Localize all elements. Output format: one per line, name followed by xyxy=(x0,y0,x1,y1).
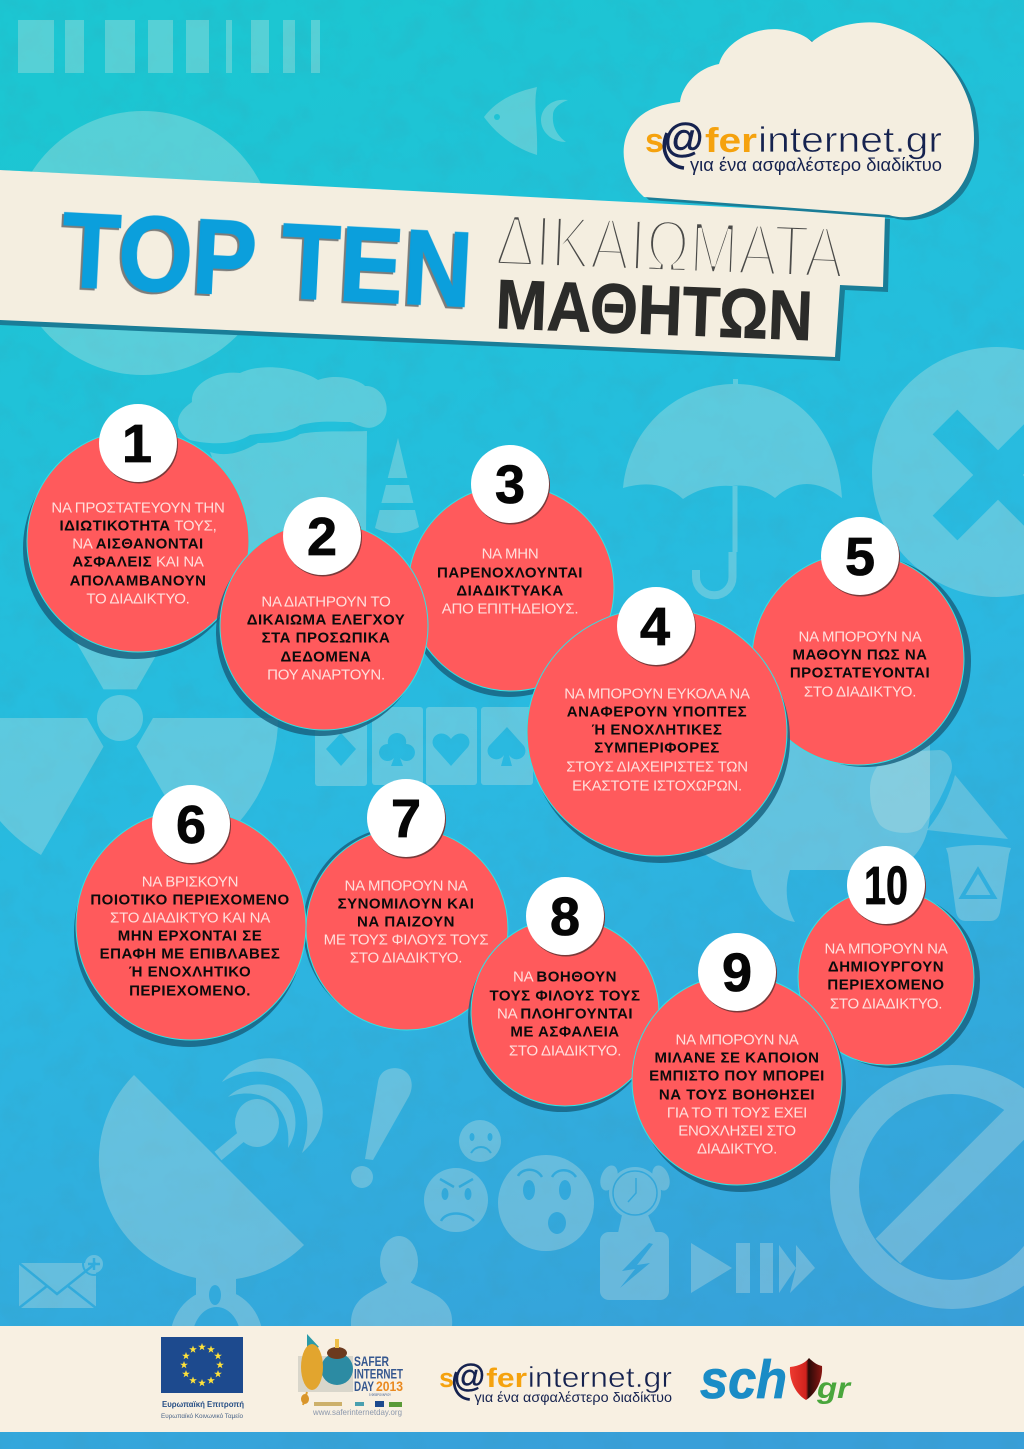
icon: alarm clock xyxy=(600,1166,670,1232)
icon: radiation symbol xyxy=(0,560,278,855)
circle 1: ΝΑ ΠΡΟΣΤΑΤΕΥΟΥΝ ΤΗΝ xyxy=(51,500,225,516)
circle 5: ΝΑ ΜΠΟΡΟΥΝ ΝΑ xyxy=(799,628,922,646)
circle 5: 5 xyxy=(845,527,875,587)
cloud logo panel xyxy=(624,22,979,220)
rights circles xyxy=(23,404,980,1192)
circle 6: 6 xyxy=(176,795,206,855)
heading: ΜΑΘΗΤΩΝ: ΜΑΘΗΤΩΝ xyxy=(494,265,814,355)
logo: Safer Internet Day 2013: www.saferinternetday.org xyxy=(312,1407,402,1417)
icon: recycling bin xyxy=(946,845,1011,921)
logo: Safer Internet Day 2013: INTERNET xyxy=(354,1366,403,1382)
circle 1: ΑΣΦΑΛΕΙΣ ΚΑΙ ΝΑ xyxy=(72,554,204,570)
circle 7: ΝΑ ΠΑΙΖΟΥΝ xyxy=(357,914,455,930)
circle 3: ΝΑ ΜΗΝ xyxy=(482,546,538,562)
logo: saferinternet.gr: internet.gr xyxy=(758,119,942,160)
circle 9: ΔΙΑΔΙΚΤΥΟ. xyxy=(697,1140,777,1158)
heading: ΔΙΚΑΙΩΜΑΤΑ: ΔΙΚΑΙΩΜΑΤΑ xyxy=(494,198,846,294)
circle 7: ΜΕ ΤΟΥΣ ΦΙΛΟΥΣ ΤΟΥΣ xyxy=(324,932,488,948)
logo: sch.gr xyxy=(700,1350,853,1410)
icon: speech bubble xyxy=(700,740,930,922)
icon: fish xyxy=(484,87,568,155)
circle 4: ΕΚΑΣΤΟΤΕ ΙΣΤΟΧΩΡΩΝ. xyxy=(572,778,742,794)
circle 6: Ή ΕΝΟΧΛΗΤΙΚΟ xyxy=(129,964,251,980)
circle 2: ΔΕΔΟΜΕΝΑ xyxy=(280,648,372,666)
circle 1: 1 xyxy=(122,414,152,474)
icon: playing cards xyxy=(315,707,533,786)
icon: barcode xyxy=(18,20,320,73)
icon: satellite dish xyxy=(99,1058,323,1360)
circle 8: ΝΑ ΒΟΗΘΟΥΝ xyxy=(513,968,617,986)
circle 6: ΝΑ ΒΡΙΣΚΟΥΝ xyxy=(142,874,238,890)
circle 6: ΠΟΙΟΤΙΚΟ ΠΕΡΙΕΧΟΜΕΝΟ xyxy=(90,892,290,908)
circle 4: ΣΤΟΥΣ ΔΙΑΧΕΙΡΙΣΤΕΣ ΤΩΝ xyxy=(566,758,748,776)
circle 4 xyxy=(527,587,790,863)
circle 4: ΣΥΜΠΕΡΙΦΟΡΕΣ xyxy=(594,740,720,756)
circle 3: ΠΑΡΕΝΟΧΛΟΥΝΤΑΙ xyxy=(437,564,583,582)
logo: saferinternet.gr: fer xyxy=(705,122,757,160)
circle 10: ΝΑ ΜΠΟΡΟΥΝ ΝΑ xyxy=(825,940,948,958)
circle 1 xyxy=(23,404,249,659)
circle 1: ΙΔΙΩΤΙΚΟΤΗΤΑ ΤΟΥΣ, xyxy=(59,518,217,534)
circle 10: 10 xyxy=(864,856,908,916)
logo: saferinternet.gr footer xyxy=(439,1358,672,1405)
banner shadow xyxy=(0,170,890,361)
circle 10: ΔΗΜΙΟΥΡΓΟΥΝ xyxy=(828,958,944,976)
circle 2: 2 xyxy=(307,507,337,567)
circle 5: ΣΤΟ ΔΙΑΔΙΚΤΥΟ. xyxy=(804,684,916,700)
logo: saferinternet.gr footer: @ xyxy=(453,1358,486,1394)
circle 3: ΔΙΑΔΙΚΤΥΑΚΑ xyxy=(456,582,564,600)
icon: large circle behind banner xyxy=(11,111,275,375)
circle 3 xyxy=(406,445,614,697)
logo: sch.gr: gr xyxy=(816,1372,853,1405)
footer strip xyxy=(0,1326,1024,1432)
logo: Safer Internet Day 2013: 5 ΦΕΒΡΟΥΑΡΙΟΥ xyxy=(369,1392,391,1397)
circle 6: ΜΗΝ ΕΡΧΟΝΤΑΙ ΣΕ xyxy=(118,928,262,944)
icon: surprised face xyxy=(498,1155,594,1251)
logo: Safer Internet Day 2013 xyxy=(298,1334,403,1417)
header banner xyxy=(0,170,890,361)
circle 8: ΜΕ ΑΣΦΑΛΕΙΑ xyxy=(510,1024,620,1040)
circle 10: ΠΕΡΙΕΧΟΜΕΝΟ xyxy=(827,976,945,994)
circle 7: ΝΑ ΜΠΟΡΟΥΝ ΝΑ xyxy=(345,878,468,894)
heading: TOP TEN: TOP TEN xyxy=(59,189,475,330)
logo: saferinternet.gr footer: για ένα ασφαλέστερο διαδίκτυο xyxy=(474,1389,672,1405)
cloud xyxy=(624,22,974,217)
circle 6: ΣΤΟ ΔΙΑΔΙΚΤΥΟ ΚΑΙ ΝΑ xyxy=(110,910,270,926)
circle 2 xyxy=(216,497,428,736)
logo: Safer Internet Day 2013: SAFER xyxy=(354,1353,389,1369)
circle 9: ΕΜΠΙΣΤΟ ΠΟΥ ΜΠΟΡΕΙ xyxy=(649,1068,825,1084)
circle 6: ΕΠΑΦΗ ΜΕ ΕΠΙΒΛΑΒΕΣ xyxy=(100,946,280,962)
logo: saferinternet.gr: s xyxy=(645,122,664,160)
circle 2: ΣΤΑ ΠΡΟΣΩΠΙΚΑ xyxy=(262,630,390,646)
icon: drink with foam xyxy=(178,367,387,640)
circle 4: 4 xyxy=(640,597,670,657)
logo: Safer Internet Day 2013: 2013 xyxy=(376,1378,403,1394)
circle 9: ΓΙΑ ΤΟ ΤΙ ΤΟΥΣ ΕΧΕΙ xyxy=(667,1104,807,1122)
circle 8: 8 xyxy=(550,887,580,947)
icon: prohibition sign xyxy=(844,1080,1024,1294)
circle 8: ΤΟΥΣ ΦΙΛΟΥΣ ΤΟΥΣ xyxy=(490,988,640,1004)
circle 9: ΝΑ ΜΠΟΡΟΥΝ ΝΑ xyxy=(676,1032,799,1048)
icon: X circle xyxy=(872,347,1024,597)
circle 3: 3 xyxy=(495,455,525,515)
icon: person xyxy=(351,1236,452,1326)
circle 10: ΣΤΟ ΔΙΑΔΙΚΤΥΟ. xyxy=(830,996,942,1012)
logo: EU flag xyxy=(161,1337,244,1420)
logo: saferinternet.gr footer: fer xyxy=(486,1363,527,1393)
circle 5: ΜΑΘΟΥΝ ΠΩΣ ΝΑ xyxy=(792,646,928,664)
icon: envelope xyxy=(19,1255,103,1308)
logo: saferinternet.gr footer: internet.gr xyxy=(528,1361,672,1393)
circle 9: 9 xyxy=(722,943,752,1003)
logo: saferinternet.gr: για ένα ασφαλέστερο διαδίκτυο xyxy=(690,155,942,175)
logo: Safer Internet Day 2013: DAY xyxy=(354,1378,374,1394)
circle 9: ΜΙΛΑΝΕ ΣΕ ΚΑΠΟΙΟΝ xyxy=(654,1050,820,1066)
circle 4: ΑΝΑΦΕΡΟΥΝ ΥΠΟΠΤΕΣ xyxy=(567,704,747,720)
cloud shadow xyxy=(629,25,979,220)
circle 8: ΝΑ ΠΛΟΗΓΟΥΝΤΑΙ xyxy=(497,1006,633,1022)
icon: sad face xyxy=(459,1120,501,1162)
circle 9 xyxy=(632,933,846,1192)
circle 9: ΝΑ ΤΟΥΣ ΒΟΗΘΗΣΕΙ xyxy=(659,1086,815,1104)
circle 2: ΝΑ ΔΙΑΤΗΡΟΥΝ ΤΟ xyxy=(261,594,391,610)
circle 7: 7 xyxy=(391,789,421,849)
icon: exclamation mark xyxy=(351,1068,412,1188)
circle 1: ΑΠΟΛΑΜΒΑΝΟΥΝ xyxy=(70,572,206,590)
logo: sch.gr: sch xyxy=(700,1350,787,1410)
circle 3: ΑΠΟ ΕΠΙΤΗΔΕΙΟΥΣ. xyxy=(442,600,578,618)
circle 7 xyxy=(303,779,508,1030)
banner xyxy=(0,170,885,357)
circle 9: ΕΝΟΧΛΗΣΕΙ ΣΤΟ xyxy=(678,1122,796,1140)
circle 8 xyxy=(468,877,659,1112)
circle 10 xyxy=(798,846,980,1068)
icon: angry face xyxy=(424,1168,488,1232)
circle 2: ΠΟΥ ΑΝΑΡΤΟΥΝ. xyxy=(267,666,385,684)
circle 1: ΤΟ ΔΙΑΔΙΚΤΥΟ. xyxy=(86,590,190,608)
icon: party hat xyxy=(375,438,419,533)
logo: saferinternet.gr xyxy=(645,115,942,175)
circle 6: ΠΕΡΙΕΧΟΜΕΝΟ. xyxy=(129,982,251,1000)
circle 2: ΔΙΚΑΙΩΜΑ ΕΛΕΓΧΟΥ xyxy=(247,612,405,628)
circle 5: ΠΡΟΣΤΑΤΕΥΟΝΤΑΙ xyxy=(790,664,930,682)
circle 7: ΣΥΝΟΜΙΛΟΥΝ ΚΑΙ xyxy=(338,896,474,912)
circle 1: ΝΑ ΑΙΣΘΑΝΟΝΤΑΙ xyxy=(72,536,204,552)
logo: EU flag: Ευρωπαϊκή Επιτροπή xyxy=(162,1399,244,1409)
icon: umbrella xyxy=(623,379,842,595)
icon: media controls xyxy=(691,1243,815,1293)
icon: battery with lightning xyxy=(600,1232,669,1300)
circle 4: Ή ΕΝΟΧΛΗΤΙΚΕΣ xyxy=(592,722,722,738)
icon: ice cream xyxy=(870,750,1008,839)
circle 4: ΝΑ ΜΠΟΡΟΥΝ ΕΥΚΟΛΑ ΝΑ xyxy=(564,686,750,702)
logo: saferinternet.gr: @ xyxy=(663,115,705,161)
circle 7: ΣΤΟ ΔΙΑΔΙΚΤΥΟ. xyxy=(350,950,462,966)
circle 8: ΣΤΟ ΔΙΑΔΙΚΤΥΟ. xyxy=(509,1042,621,1060)
circle 5 xyxy=(752,517,971,767)
logo: saferinternet.gr footer: s xyxy=(439,1363,454,1393)
logo: EU flag: Ευρωπαϊκό Κοινωνικό Ταμείο xyxy=(161,1412,243,1420)
circle 6 xyxy=(74,785,306,1047)
